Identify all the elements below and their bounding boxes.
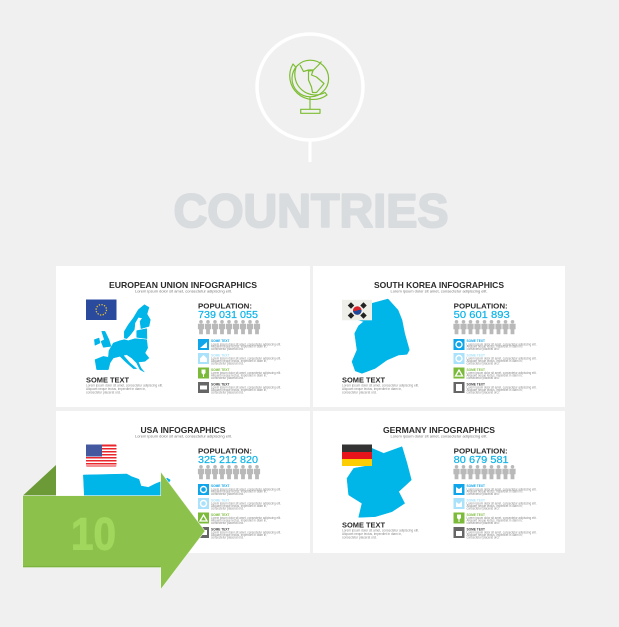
list item 3: SOME TEXT — [211, 368, 229, 372]
panel: European Union — [56, 266, 310, 407]
list item 1: consectetur placerat orci. — [211, 347, 244, 351]
number: population: 50 601 893 — [454, 310, 510, 321]
list item 2: Lorem ipsum dolor sit amet, consectetur adipiscing elit. — [466, 502, 537, 506]
list item 4: Aliquam neque lectus, imperdiet in diam in, — [211, 533, 267, 537]
list item 4 — [198, 382, 281, 394]
list item 3: Aliquam neque lectus, imperdiet in diam in, — [466, 374, 523, 378]
icon row: people — [453, 465, 516, 479]
heading: South Korea Infographics: SOUTH KOREA INFOGRAPHICS — [374, 281, 505, 290]
number: 10: 10 — [71, 508, 116, 560]
list item 3 — [454, 368, 537, 380]
list item 4 — [198, 527, 281, 539]
list item 4 — [454, 382, 537, 394]
text block: some text: consectetur placerat orci. — [342, 390, 377, 394]
list item 1: SOME TEXT — [211, 339, 229, 343]
list item 2: consectetur placerat orci. — [466, 506, 500, 510]
list item 3 — [198, 512, 281, 525]
number: population: 739 031 055 — [198, 310, 259, 321]
text block: some text: SOME TEXT — [86, 376, 130, 384]
flag: Germany — [342, 444, 372, 466]
flag: South Korea — [342, 300, 372, 320]
panel: South Korea — [313, 266, 565, 407]
list item 3 — [198, 368, 281, 380]
text block: some text: Aliquam neque lectus, imperdiet in diam in, — [342, 387, 402, 391]
list item 4: consectetur placerat orci. — [466, 390, 500, 394]
list item 4: Aliquam neque lectus, imperdiet in diam in, — [466, 388, 523, 392]
list item 1: Lorem ipsum dolor sit amet, consectetur adipiscing elit. — [211, 342, 281, 346]
list item 4: Lorem ipsum dolor sit amet, consectetur adipiscing elit. — [211, 531, 281, 535]
list item 3: SOME TEXT — [211, 513, 229, 517]
list item 4: SOME TEXT — [466, 528, 485, 532]
arrow banner: 10 — [23, 465, 205, 590]
list item 2: Lorem ipsum dolor sit amet, consectetur adipiscing elit. — [466, 357, 537, 361]
list item 2: SOME TEXT — [466, 354, 485, 358]
list item 1: Aliquam neque lectus, imperdiet in diam in, — [466, 490, 523, 494]
list item 3: Aliquam neque lectus, imperdiet in diam in, — [466, 518, 523, 522]
list item 4: SOME TEXT — [211, 382, 229, 386]
text block: some text: Lorem ipsum dolor sit amet, consectetur adipiscing elit. — [342, 528, 419, 532]
list item 4: Aliquam neque lectus, imperdiet in diam in, — [466, 533, 523, 537]
list item 1: Lorem ipsum dolor sit amet, consectetur adipiscing elit. — [466, 487, 537, 491]
list item 1: Lorem ipsum dolor sit amet, consectetur adipiscing elit. — [466, 342, 537, 346]
subtitle: Lorem ipsum dolor sit amet, consectetur adipiscing elit. — [135, 290, 232, 294]
heading: population: POPULATION: — [454, 446, 508, 456]
icon row: people — [198, 320, 260, 334]
list item 2: Aliquam neque lectus, imperdiet in diam in, — [211, 359, 267, 363]
list item 3: consectetur placerat orci. — [211, 376, 244, 380]
subtitle: Lorem ipsum dolor sit amet, consectetur adipiscing elit. — [390, 434, 488, 438]
text block: some text — [86, 376, 163, 394]
number: population: 325 212 820 — [198, 455, 259, 466]
subtitle: Lorem ipsum dolor sit amet, consectetur adipiscing elit. — [135, 434, 232, 438]
list item 3: Lorem ipsum dolor sit amet, consectetur adipiscing elit. — [211, 516, 281, 520]
text block: some text: Lorem ipsum dolor sit amet, consectetur adipiscing elit. — [342, 384, 419, 388]
heading: USA Infographics: USA INFOGRAPHICS — [140, 426, 226, 435]
text block: some text: SOME TEXT — [342, 520, 386, 530]
list item 1: consectetur placerat orci. — [211, 492, 244, 496]
list item 3: Lorem ipsum dolor sit amet, consectetur adipiscing elit. — [466, 371, 537, 375]
heading: population: POPULATION: — [198, 302, 252, 310]
text block: some text: consectetur placerat orci. — [86, 390, 121, 394]
list item 2: consectetur placerat orci. — [211, 361, 244, 365]
list item 1: Aliquam neque lectus, imperdiet in diam in, — [211, 345, 267, 349]
panel: Germany — [313, 411, 565, 553]
text block: some text: consectetur placerat orci. — [342, 536, 377, 540]
list item 1: consectetur placerat orci. — [466, 347, 500, 351]
list item 3: Lorem ipsum dolor sit amet, consectetur adipiscing elit. — [211, 371, 281, 375]
list item 3: SOME TEXT — [466, 368, 485, 372]
list item 1: SOME TEXT — [466, 484, 485, 488]
flag: USA — [86, 444, 116, 466]
list item 2 — [454, 498, 537, 510]
list item 4: SOME TEXT — [211, 528, 229, 532]
list item 4: Lorem ipsum dolor sit amet, consectetur adipiscing elit. — [466, 531, 537, 535]
list item 3: Lorem ipsum dolor sit amet, consectetur adipiscing elit. — [466, 516, 537, 520]
map: USA — [83, 474, 170, 510]
heading: Germany Infographics: GERMANY INFOGRAPHICS — [383, 426, 496, 435]
number: population: 80 679 581 — [454, 455, 509, 466]
list item 2: Aliquam neque lectus, imperdiet in diam in, — [211, 504, 267, 508]
list item 2: consectetur placerat orci. — [211, 506, 244, 510]
text block: some text: Lorem ipsum dolor sit amet, consectetur adipiscing elit. — [86, 384, 163, 388]
map: Germany — [347, 447, 411, 517]
list item 2: Lorem ipsum dolor sit amet, consectetur adipiscing elit. — [211, 357, 281, 361]
list item 4: consectetur placerat orci. — [211, 535, 244, 539]
list item 2 — [198, 498, 281, 510]
text block: some text — [342, 520, 419, 540]
list item 2: consectetur placerat orci. — [466, 361, 500, 365]
list item 3: SOME TEXT — [466, 513, 485, 517]
panel: USA — [56, 411, 310, 553]
list item 3 — [454, 512, 537, 525]
list item 3: consectetur placerat orci. — [211, 521, 244, 525]
list item 2: SOME TEXT — [211, 354, 229, 358]
list item 3: consectetur placerat orci. — [466, 521, 500, 525]
list item 1: SOME TEXT — [466, 339, 485, 343]
list item 4: consectetur placerat orci. — [211, 390, 244, 394]
list item 1 — [198, 484, 281, 496]
list item 2: Aliquam neque lectus, imperdiet in diam in, — [466, 359, 523, 363]
list item 1: Lorem ipsum dolor sit amet, consectetur adipiscing elit. — [211, 487, 281, 491]
list item 4: Lorem ipsum dolor sit amet, consectetur adipiscing elit. — [211, 386, 281, 390]
list item 2: SOME TEXT — [466, 498, 485, 502]
list item 4: SOME TEXT — [466, 382, 485, 386]
list item 4: Lorem ipsum dolor sit amet, consectetur adipiscing elit. — [466, 386, 537, 390]
text block: some text: Aliquam neque lectus, imperdiet in diam in, — [86, 387, 146, 391]
list item 1 — [454, 339, 537, 351]
text block: some text: Aliquam neque lectus, imperdiet in diam in, — [342, 532, 402, 536]
map: Europe — [94, 305, 150, 372]
icon row: people — [198, 465, 260, 479]
flag: EU — [86, 300, 116, 320]
heading: European Union Infographics: EUROPEAN UNION INFOGRAPHICS — [109, 281, 258, 290]
list item 2: Aliquam neque lectus, imperdiet in diam in, — [466, 504, 523, 508]
list item 2 — [454, 353, 537, 365]
list item 1: SOME TEXT — [211, 484, 229, 488]
text block: some text: SOME TEXT — [342, 376, 386, 384]
map: South Korea — [352, 299, 409, 373]
list item 3: Aliquam neque lectus, imperdiet in diam in, — [211, 374, 267, 378]
heading: population: POPULATION: — [198, 446, 252, 456]
list item 4: Aliquam neque lectus, imperdiet in diam in, — [211, 388, 267, 392]
list item 1: consectetur placerat orci. — [466, 492, 500, 496]
list item 4: consectetur placerat orci. — [466, 535, 500, 539]
icon: globe in circle — [257, 34, 363, 162]
subtitle: Lorem ipsum dolor sit amet, consectetur adipiscing elit. — [390, 290, 488, 294]
list item 3: Aliquam neque lectus, imperdiet in diam in, — [211, 518, 267, 522]
list item 1: Aliquam neque lectus, imperdiet in diam in, — [466, 345, 523, 349]
list item 4 — [454, 527, 537, 539]
heading: COUNTRIES: COUNTRIES — [174, 184, 448, 237]
list item 3: consectetur placerat orci. — [466, 376, 500, 380]
text block: some text — [342, 376, 419, 394]
list item 2 — [198, 353, 281, 365]
list item 2: SOME TEXT — [211, 498, 229, 502]
icon row: people — [453, 320, 516, 334]
list item 2: Lorem ipsum dolor sit amet, consectetur adipiscing elit. — [211, 502, 281, 506]
list item 1 — [198, 339, 281, 351]
list item 1: Aliquam neque lectus, imperdiet in diam in, — [211, 490, 267, 494]
list item 1 — [454, 484, 537, 496]
heading: population: POPULATION: — [454, 302, 508, 310]
